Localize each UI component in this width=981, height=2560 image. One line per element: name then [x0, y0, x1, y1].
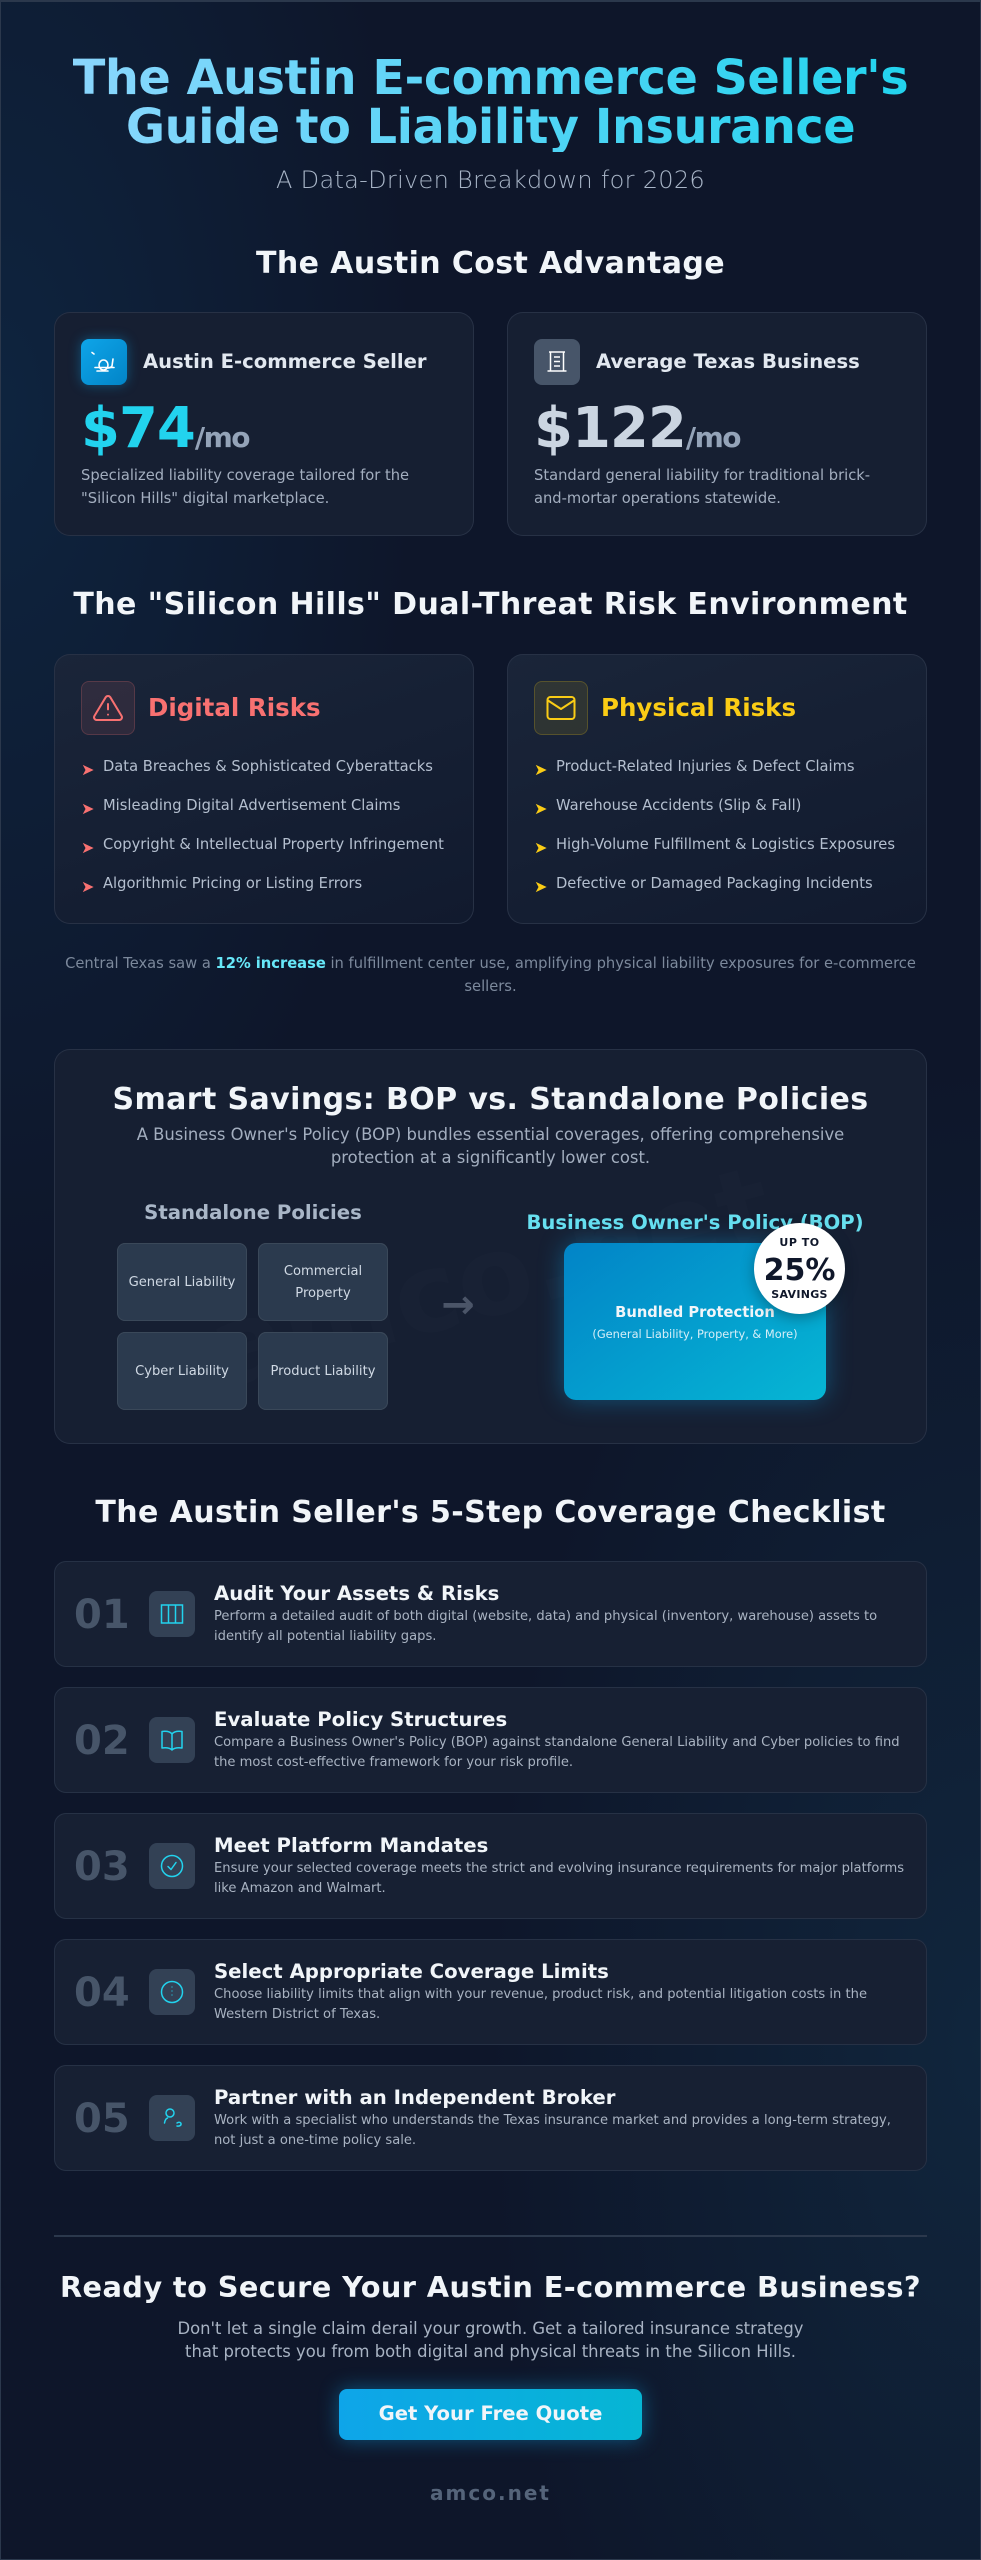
standalone policy grid — [117, 1243, 388, 1410]
CTA button: Get Your Free Quote — [379, 2402, 602, 2425]
risk list: ➤ — [81, 799, 94, 818]
step title: Select Appropriate Coverage Limits — [214, 1960, 609, 1983]
title: The Austin E-commerce Seller's — [73, 51, 908, 106]
step number: 01 — [74, 1592, 130, 1638]
CTA heading: Ready to Secure Your Austin E-commerce Business? — [60, 2270, 921, 2304]
step description: Choose liability limits that align with your revenue, product risk, and potential litigation costs in the — [214, 1987, 867, 2002]
watermark: amco.net — [195, 1141, 786, 1413]
savings badge — [754, 1223, 845, 1314]
step number: 05 — [74, 2096, 130, 2142]
card description: and-mortar operations statewide. — [534, 490, 781, 507]
risk list: High-Volume Fulfillment & Logistics Exposures — [556, 836, 895, 853]
step title: Meet Platform Mandates — [214, 1834, 488, 1857]
step 4 — [54, 1939, 927, 2045]
panel description: protection at a significantly lower cost. — [331, 1148, 650, 1167]
standalone policy grid: Commercial — [284, 1264, 362, 1279]
CTA text: Don't let a single claim derail your growth. Get a tailored insurance strategy — [178, 2319, 803, 2338]
panel description: A Business Owner's Policy (BOP) bundles essential coverages, offering comprehensive — [137, 1125, 844, 1144]
icon: check circle — [149, 1843, 195, 1889]
risk list: ➤ — [81, 760, 94, 779]
heading: cost advantage: The Austin Cost Advantage — [256, 246, 725, 281]
step title: Partner with an Independent Broker — [214, 2086, 615, 2109]
step number: 02 — [74, 1718, 130, 1764]
risk list: ➤ — [81, 877, 94, 896]
panel: physical risks — [507, 654, 927, 924]
icon: shopping cart — [81, 339, 127, 385]
risk heading: Physical Risks — [601, 693, 796, 722]
heading: checklist: The Austin Seller's 5-Step Coverage Checklist — [95, 1495, 886, 1530]
risk list: ➤ — [534, 760, 547, 779]
step number: 03 — [74, 1844, 130, 1890]
risk list: Data Breaches & Sophisticated Cyberattacks — [103, 758, 433, 775]
step title: Evaluate Policy Structures — [214, 1708, 507, 1731]
CTA button — [339, 2389, 642, 2440]
standalone policy grid: Property — [295, 1286, 351, 1301]
panel description — [136, 1125, 844, 1167]
CTA text — [178, 2319, 803, 2361]
card description: Specialized liability coverage tailored for the — [81, 467, 409, 484]
statistic note: sellers. — [464, 978, 517, 995]
standalone heading: Standalone Policies — [144, 1201, 362, 1224]
heading: dual-threat risk: The "Silicon Hills" Dual-Threat Risk Environment — [73, 587, 908, 622]
panel: BOP vs standalone — [54, 1049, 927, 1444]
card description — [534, 467, 870, 507]
icon: envelope — [534, 681, 588, 735]
CTA text: that protects you from both digital and physical threats in the Silicon Hills. — [185, 2342, 796, 2361]
step description — [214, 1861, 904, 1896]
card description: "Silicon Hills" digital marketplace. — [81, 490, 329, 507]
risk list: Misleading Digital Advertisement Claims — [103, 797, 400, 814]
icon: warning triangle — [81, 681, 135, 735]
badge bottom label: SAVINGS — [771, 1288, 828, 1301]
standalone policy grid: Product Liability — [271, 1364, 375, 1379]
step description: Western District of Texas. — [214, 2007, 380, 2022]
step description: Perform a detailed audit of both digital (website, data) and physical (inventory, warehouse) assets to — [214, 1609, 877, 1624]
risk list: ➤ — [534, 877, 547, 896]
panel: average Texas business cost — [507, 312, 927, 536]
statistic note — [65, 955, 916, 995]
card description — [81, 467, 409, 507]
footer: website: amco.net — [430, 2481, 551, 2505]
step number: 04 — [74, 1970, 130, 2016]
BOP bundle box — [564, 1243, 826, 1400]
step description: not just a one-time policy sale. — [214, 2133, 416, 2148]
risk heading: Digital Risks — [148, 693, 321, 722]
step title: Audit Your Assets & Risks — [214, 1582, 499, 1605]
risk list: ➤ — [534, 838, 547, 857]
step description — [214, 1987, 867, 2022]
bundle title: Bundled Protection — [615, 1304, 775, 1321]
step description — [214, 2113, 891, 2148]
badge top label: UP TO — [779, 1236, 820, 1249]
step 1 — [54, 1561, 927, 1667]
panel: Austin e-commerce seller cost — [54, 312, 474, 536]
BOP heading: Business Owner's Policy (BOP) — [526, 1211, 864, 1234]
icon: person — [149, 2095, 195, 2141]
risk list — [534, 758, 895, 896]
panel: digital risks — [54, 654, 474, 924]
step description: the most cost-effective framework for your risk profile. — [214, 1755, 573, 1770]
arrow: → — [441, 1282, 475, 1328]
risk list: ➤ — [81, 838, 94, 857]
step description: like Amazon and Walmart. — [214, 1881, 386, 1896]
step 3 — [54, 1813, 927, 1919]
step 5 — [54, 2065, 927, 2171]
icon: open book — [149, 1717, 195, 1763]
card description: Standard general liability for traditional brick- — [534, 467, 870, 484]
statistic note: Central Texas saw a 12% increase in fulfillment center use, amplifying physical liability exposures for e-commerce — [65, 955, 916, 972]
step 2 — [54, 1687, 927, 1793]
standalone policy grid: General Liability — [129, 1275, 235, 1290]
bundle details: (General Liability, Property, & More) — [592, 1327, 798, 1341]
step description: Ensure your selected coverage meets the strict and evolving insurance requirements for major platforms — [214, 1861, 904, 1876]
card title: Austin E-commerce Seller — [143, 350, 427, 373]
price: $74/mo: $74/mo — [81, 396, 249, 461]
icon: building — [534, 339, 580, 385]
title — [73, 51, 908, 155]
step description — [214, 1609, 877, 1644]
risk list: Defective or Damaged Packaging Incidents — [556, 875, 873, 892]
icon: info circle — [149, 1969, 195, 2015]
badge value: 25% — [764, 1253, 835, 1288]
step description: Work with a specialist who understands the Texas insurance market and provides a long-term strategy, — [214, 2113, 891, 2128]
panel heading: Smart Savings: BOP vs. Standalone Policies — [112, 1082, 869, 1117]
risk list: Algorithmic Pricing or Listing Errors — [103, 875, 362, 892]
title: Guide to Liability Insurance — [126, 100, 855, 155]
step description: identify all potential liability gaps. — [214, 1629, 436, 1644]
subtitle: A Data-Driven Breakdown for 2026 — [276, 166, 705, 194]
card title: Average Texas Business — [596, 350, 860, 373]
icon: columns — [149, 1591, 195, 1637]
price: $122/mo: $122/mo — [534, 396, 740, 461]
standalone policy grid: Cyber Liability — [135, 1364, 229, 1379]
step description — [214, 1735, 900, 1770]
risk list: ➤ — [534, 799, 547, 818]
risk list: Product-Related Injuries & Defect Claims — [556, 758, 855, 775]
risk list: Warehouse Accidents (Slip & Fall) — [556, 797, 801, 814]
risk list — [81, 758, 444, 896]
step description: Compare a Business Owner's Policy (BOP) against standalone General Liability and Cyber policies to find — [214, 1735, 900, 1750]
risk list: Copyright & Intellectual Property Infringement — [103, 836, 444, 853]
